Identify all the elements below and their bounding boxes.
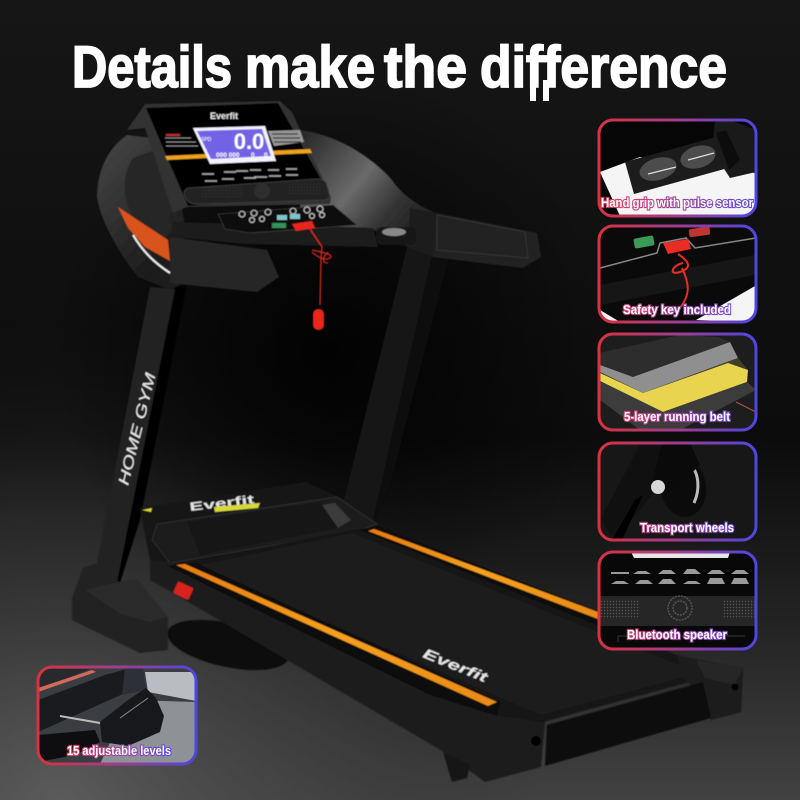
lcd screen: 0.0 — [234, 129, 264, 154]
console tray — [172, 222, 378, 247]
console speaker — [184, 179, 329, 204]
wheel — [661, 467, 706, 517]
program profiles — [202, 169, 298, 181]
panel: safety key — [599, 226, 756, 322]
white background — [600, 157, 755, 216]
frame — [599, 334, 756, 430]
lcd screen: 000 000 — [216, 152, 240, 159]
hub — [651, 480, 665, 494]
frame — [599, 552, 756, 649]
safety key and cord — [292, 221, 331, 330]
title: difference — [480, 35, 727, 100]
belt logo: Everfit — [421, 645, 492, 686]
label: Transport wheels — [640, 520, 734, 535]
rear end cap — [677, 655, 743, 720]
label: Bluetooth speaker — [627, 627, 727, 642]
left orange stripe — [176, 564, 497, 706]
treadmill — [72, 101, 743, 782]
grip — [625, 130, 740, 194]
label: Safety key included — [623, 303, 731, 317]
right orange stripe — [368, 529, 598, 619]
lcd screen — [193, 126, 276, 164]
running deck — [168, 527, 704, 722]
title: Details — [72, 35, 232, 100]
console chart sticker — [268, 130, 304, 146]
right wing handle — [300, 130, 541, 268]
speaker bar — [599, 596, 756, 626]
left upright — [97, 285, 187, 583]
white accent line — [133, 235, 170, 273]
start button — [633, 235, 655, 249]
lcd screen: 0 — [251, 152, 255, 159]
right rail channel — [360, 527, 600, 626]
red key — [663, 239, 691, 254]
panel: transport wheels — [599, 443, 756, 540]
frame — [599, 120, 756, 216]
lcd screen: 0 — [264, 152, 268, 159]
base foot — [72, 563, 168, 653]
title: make — [245, 35, 375, 100]
label: 15 adjustable levels — [67, 744, 171, 758]
title — [72, 35, 727, 101]
corner foot — [443, 752, 470, 782]
console stripe — [165, 149, 312, 160]
console — [127, 101, 331, 213]
warning text block — [165, 134, 198, 146]
upright label: HOME GYM — [115, 371, 160, 487]
orange accent — [118, 207, 170, 261]
under-deck disk — [163, 611, 293, 679]
hood logo: Everfit — [189, 492, 255, 514]
waveforms — [611, 569, 749, 584]
frame — [599, 226, 756, 322]
frame — [38, 667, 196, 764]
side badge — [173, 581, 194, 600]
lcd screen: SPD — [201, 137, 212, 143]
label: 5-layer running belt — [624, 410, 731, 424]
right upright — [344, 247, 448, 525]
frame — [599, 443, 756, 540]
panel: hand grip — [599, 120, 756, 216]
panel: running belt — [599, 334, 756, 430]
belt — [196, 533, 699, 715]
right grip — [376, 227, 416, 245]
console logo: Everfit — [210, 111, 238, 121]
left arm end block — [170, 237, 279, 292]
left hoop handle — [97, 135, 185, 290]
panel: adjustable levels — [38, 667, 196, 764]
base foot — [100, 688, 164, 746]
motor hood — [140, 482, 377, 566]
keypad — [218, 205, 357, 233]
panel: bluetooth speaker — [599, 552, 756, 649]
label: Hand grip with pulse sensor — [601, 196, 753, 210]
yellow foam — [600, 363, 748, 412]
rear frame — [545, 682, 711, 766]
left rail channel — [168, 563, 500, 716]
title: the — [384, 35, 467, 100]
deck side — [150, 560, 545, 782]
stop button — [689, 227, 710, 237]
